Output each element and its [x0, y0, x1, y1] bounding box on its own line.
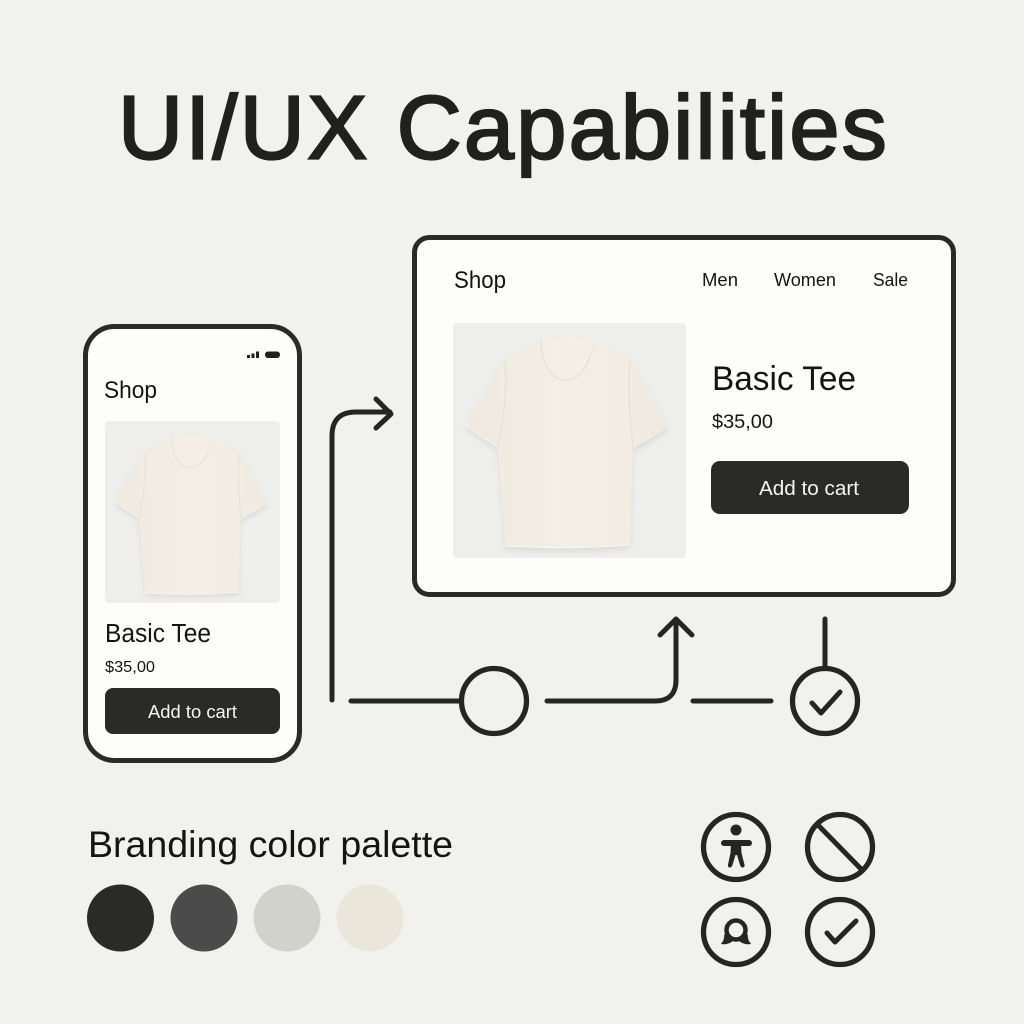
- heading: mobile shop: Shop: [104, 377, 157, 404]
- price: mobile: $35,00: [105, 659, 155, 676]
- color palette swatches: [87, 884, 404, 952]
- navigation menu: Men: [702, 270, 738, 290]
- heading: desktop shop: Shop: [454, 267, 506, 294]
- icon: badge: [704, 900, 768, 964]
- product name: mobile: Basic Tee: [105, 620, 211, 648]
- heading: branding color palette: Branding color palette: [88, 824, 453, 865]
- navigation menu: Sale: [873, 270, 908, 290]
- price: desktop: $35,00: [712, 412, 773, 433]
- product image: desktop tee: [453, 323, 686, 558]
- navigation menu: Women: [774, 270, 836, 290]
- flow: line into empty node: [351, 668, 526, 734]
- button: desktop add to cart: Add to cart: [759, 477, 859, 500]
- icon: accessibility person: [704, 814, 768, 880]
- button: desktop add to cart: [711, 461, 909, 514]
- product image: mobile tee: [105, 421, 280, 603]
- product name: desktop: Basic Tee: [712, 360, 856, 398]
- icon: prohibited: [808, 814, 872, 880]
- arrow: mobile to desktop: [332, 399, 391, 700]
- panel: mobile mockup: [86, 326, 300, 760]
- panel: desktop mockup: [414, 238, 954, 594]
- flow: connector to check node: [693, 698, 771, 704]
- icon: flow check node: [792, 619, 858, 734]
- navigation menu: [702, 270, 908, 290]
- arrow: flow up to desktop: [547, 619, 692, 701]
- icon: check: [808, 900, 872, 964]
- button: mobile add to cart: Add to cart: [148, 702, 237, 722]
- title: UI/UX Capabilities: [118, 78, 889, 178]
- button: mobile add to cart: [105, 688, 280, 734]
- icon: status bar: [247, 352, 280, 358]
